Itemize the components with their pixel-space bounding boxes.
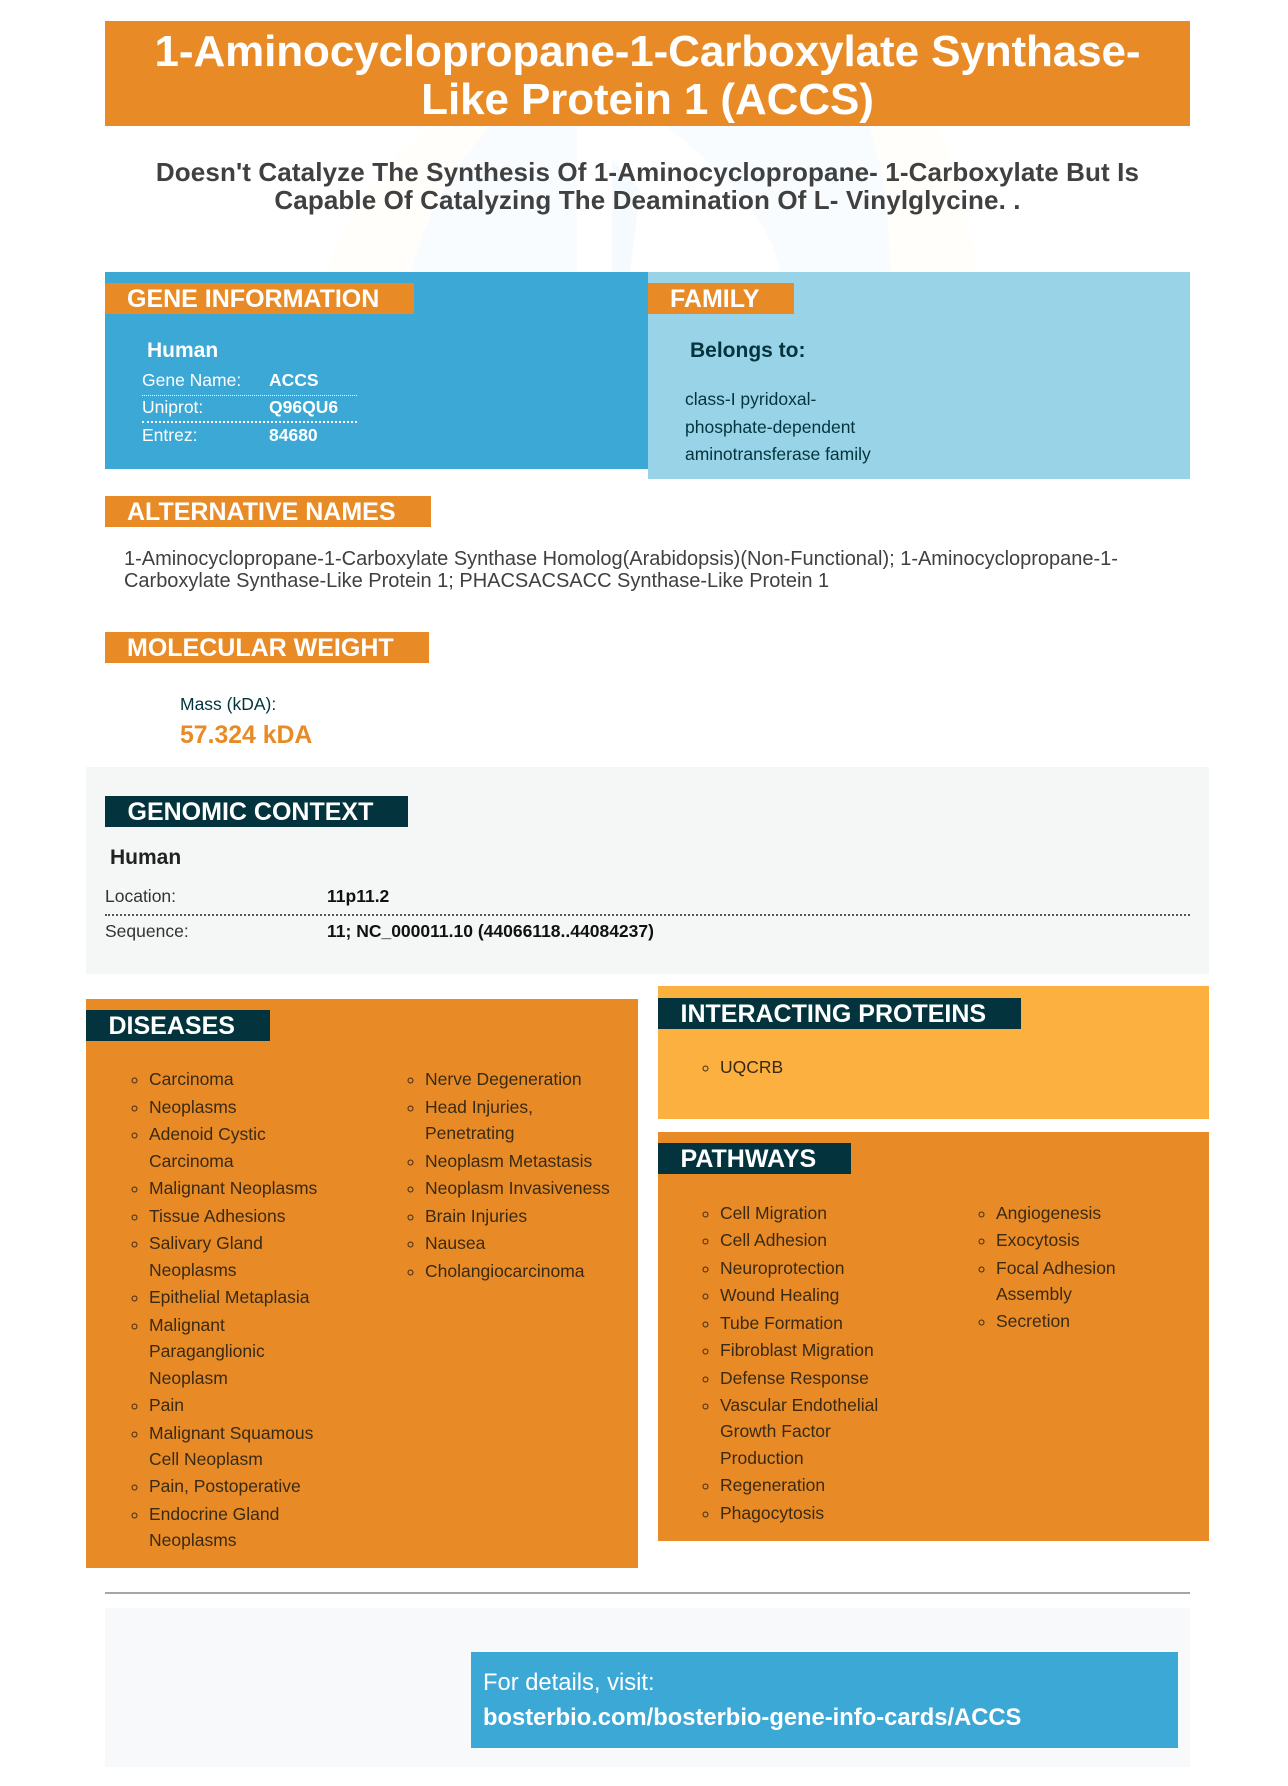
family description: phosphate-dependent xyxy=(685,416,855,436)
title banner: 1-Aminocyclopropane-1-Carboxylate Synthase- xyxy=(155,27,1140,76)
gene name row xyxy=(142,368,357,396)
callout url: bosterbio.com/bosterbio-gene-info-cards/ACCS xyxy=(483,1704,1021,1731)
heading: family: FAMILY xyxy=(670,285,759,313)
list: diseases column 1: Carcinoma xyxy=(149,1151,234,1171)
mass label: Mass (kDA): xyxy=(180,694,276,714)
list: diseases column 1: Tissue Adhesions xyxy=(149,1206,286,1226)
sequence row: Sequence: xyxy=(105,921,189,941)
entrez row: Entrez: xyxy=(142,425,197,445)
list: interacting proteins: UQCRB xyxy=(720,1057,783,1077)
uniprot row xyxy=(142,395,357,423)
list: pathways column 1 xyxy=(702,1202,878,1523)
list: diseases column 2 xyxy=(408,1069,610,1281)
alternative names text xyxy=(124,548,1118,592)
callout label: For details, visit: xyxy=(483,1669,655,1696)
sequence row xyxy=(105,921,654,941)
panel: pathways xyxy=(658,1132,1209,1541)
heading: family xyxy=(648,283,794,314)
subtitle: Capable Of Catalyzing The Deamination Of L- Vinylglycine. . xyxy=(274,185,1021,215)
heading: interacting proteins: INTERACTING PROTEINS xyxy=(680,1000,986,1028)
background logo watermark xyxy=(612,160,640,272)
uniprot row: Uniprot: xyxy=(142,397,203,417)
panel: interacting proteins xyxy=(658,986,1209,1119)
mass value: 57.324 kDA xyxy=(180,722,312,749)
list: diseases column 1 xyxy=(132,1069,317,1550)
list: diseases column 1: Carcinoma xyxy=(149,1069,234,1089)
list: pathways column 2: Assembly xyxy=(996,1284,1072,1304)
entrez row xyxy=(142,425,318,445)
list: diseases column 1: Adenoid Cystic xyxy=(149,1124,266,1144)
gene name row: Gene Name: xyxy=(142,370,241,390)
location row xyxy=(105,884,1190,916)
list: diseases column 1: Cell Neoplasm xyxy=(149,1449,263,1469)
panel: family xyxy=(648,272,1190,479)
location row: 11p11.2 xyxy=(327,886,389,906)
list: diseases column 1: Neoplasms xyxy=(149,1260,237,1280)
list: diseases column 2: Nerve Degeneration xyxy=(425,1069,582,1089)
list: diseases column 2: Cholangiocarcinoma xyxy=(425,1261,585,1281)
callout: details link xyxy=(471,1652,1178,1748)
heading: genomic context: GENOMIC CONTEXT xyxy=(128,798,373,826)
list: diseases column 1: Malignant xyxy=(149,1315,225,1335)
list: pathways column 1: Cell Migration xyxy=(720,1202,827,1222)
location row: Location: xyxy=(105,886,176,906)
list: diseases column 2: Nausea xyxy=(425,1233,485,1253)
panel: gene information xyxy=(105,272,648,469)
list: diseases column 2: Neoplasm Metastasis xyxy=(425,1151,592,1171)
list: pathways column 1: Wound Healing xyxy=(720,1285,839,1305)
list: diseases column 1: Salivary Gland xyxy=(149,1233,263,1253)
list: diseases column 2: Neoplasm Invasiveness xyxy=(425,1178,610,1198)
list: diseases column 2: Penetrating xyxy=(425,1123,515,1143)
list: pathways column 2: Angiogenesis xyxy=(996,1202,1101,1222)
entrez row: 84680 xyxy=(269,425,318,445)
heading: molecular weight: MOLECULAR WEIGHT xyxy=(127,634,394,662)
list: diseases column 1: Neoplasms xyxy=(149,1097,237,1117)
list: pathways column 1: Tube Formation xyxy=(720,1312,843,1332)
list: diseases column 1: Malignant Neoplasms xyxy=(149,1178,317,1198)
list: pathways column 1: Vascular Endothelial xyxy=(720,1395,878,1415)
list: diseases column 1: Endocrine Gland xyxy=(149,1504,279,1524)
list: pathways column 1: Phagocytosis xyxy=(720,1503,824,1523)
gene name row: ACCS xyxy=(269,370,319,390)
list: diseases column 1: Neoplasms xyxy=(149,1530,237,1550)
uniprot row: Q96QU6 xyxy=(269,397,338,417)
heading: gene information: GENE INFORMATION xyxy=(127,285,379,313)
list: pathways column 1: Fibroblast Migration xyxy=(720,1340,874,1360)
species label: Human xyxy=(110,846,181,869)
list: pathways column 2: Exocytosis xyxy=(996,1230,1080,1250)
heading: pathways: PATHWAYS xyxy=(680,1145,816,1173)
list: pathways column 1: Defense Response xyxy=(720,1368,869,1388)
sequence row: 11; NC_000011.10 (44066118..44084237) xyxy=(327,921,654,941)
family description: aminotransferase family xyxy=(685,444,871,464)
panel: genomic context xyxy=(86,767,1209,974)
list: pathways column 2 xyxy=(978,1202,1116,1331)
list: diseases column 1: Pain, Postoperative xyxy=(149,1476,301,1496)
heading: diseases: DISEASES xyxy=(108,1012,235,1040)
list: pathways column 1: Growth Factor xyxy=(720,1421,831,1441)
alternative names text: 1-Aminocyclopropane-1-Carboxylate Synthase Homolog(Arabidopsis)(Non-Functional); 1-Aminocyclopropane-1- xyxy=(124,548,1118,570)
list: diseases column 1: Neoplasm xyxy=(149,1368,228,1388)
panel: diseases xyxy=(86,999,638,1568)
belongs to label: Belongs to: xyxy=(690,339,806,362)
title banner: Like Protein 1 (ACCS) xyxy=(421,75,874,124)
family description xyxy=(685,389,871,464)
title banner xyxy=(105,21,1190,126)
list: diseases column 2: Head Injuries, xyxy=(425,1097,533,1117)
subtitle xyxy=(156,157,1139,215)
list: diseases column 1: Malignant Squamous xyxy=(149,1423,313,1443)
family description: class-I pyridoxal- xyxy=(685,389,816,409)
heading: alternative names: ALTERNATIVE NAMES xyxy=(127,498,396,526)
list: diseases column 1: Epithelial Metaplasia xyxy=(149,1287,310,1307)
list: pathways column 1: Production xyxy=(720,1448,804,1468)
list: diseases column 2: Brain Injuries xyxy=(425,1206,527,1226)
list: pathways column 2: Focal Adhesion xyxy=(996,1258,1116,1278)
list: pathways column 1: Regeneration xyxy=(720,1475,825,1495)
list: diseases column 1: Pain xyxy=(149,1395,184,1415)
alternative names text: Carboxylate Synthase-Like Protein 1; PHACSACSACC Synthase-Like Protein 1 xyxy=(124,570,829,592)
heading: diseases xyxy=(86,1010,270,1041)
list: pathways column 2: Secretion xyxy=(996,1311,1070,1331)
list: pathways column 1: Cell Adhesion xyxy=(720,1230,827,1250)
species label: Human xyxy=(147,339,218,362)
list: diseases column 1: Paraganglionic xyxy=(149,1341,265,1361)
panel: footer xyxy=(105,1608,1190,1767)
list: pathways column 1: Neuroprotection xyxy=(720,1258,845,1278)
subtitle: Doesn't Catalyze The Synthesis Of 1-Aminocyclopropane- 1-Carboxylate But Is xyxy=(156,157,1139,187)
heading: pathways xyxy=(658,1143,851,1174)
